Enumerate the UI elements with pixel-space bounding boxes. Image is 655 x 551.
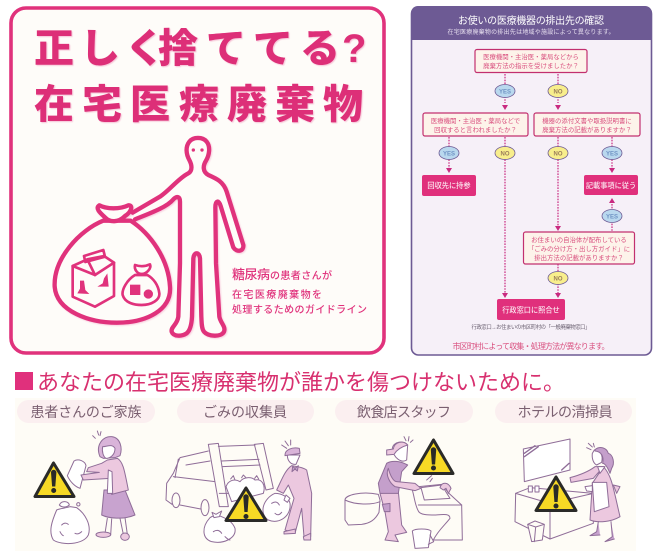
question text: 医療機関・主治医・薬局などから	[483, 52, 579, 61]
label text: ホテルの清掃員	[518, 404, 612, 420]
NO ovals: NO	[554, 89, 563, 95]
NO ovals: NO	[500, 151, 510, 157]
person outline	[133, 138, 243, 336]
NO ovals: NO	[554, 151, 563, 157]
flowchart header	[411, 6, 652, 40]
flow connectors	[449, 74, 612, 295]
question text: 廃棄方法の指示を受けましたか？	[483, 61, 579, 70]
flowchart header: 在宅医療廃棄物の排出先は地域や施設によって異なります。	[448, 28, 614, 36]
subtitle: 糖尿病	[232, 267, 270, 282]
NO ovals	[495, 84, 568, 284]
flowchart header: お使いの医療機器の排出先の確認	[458, 14, 604, 27]
icons: warning triangles	[35, 440, 576, 520]
panel: illustration strip	[15, 398, 636, 551]
title	[34, 27, 366, 127]
warning 3	[414, 440, 453, 474]
YES ovals	[439, 84, 622, 222]
heading: section title: あなたの在宅医療廃棄物が誰かを傷つけないために。	[37, 370, 565, 395]
warning 1	[35, 463, 74, 496]
title: 在宅医療廃棄物	[34, 83, 363, 127]
subtitle: 処理するためのガイドライン	[232, 303, 367, 316]
question text	[431, 52, 632, 262]
flowchart notes	[452, 323, 610, 351]
flowchart notes: 行政窓口→お住まいの市区町村の「一般廃棄物窓口」	[472, 323, 590, 331]
illustration: restaurant staff	[345, 437, 462, 548]
label text: ごみの収集員	[203, 404, 287, 420]
garbage bag	[55, 221, 170, 323]
eyes	[192, 148, 195, 152]
small bag	[123, 275, 159, 305]
label text	[30, 404, 612, 420]
subtitle	[232, 267, 367, 316]
NO ovals: NO	[554, 276, 563, 282]
YES ovals: YES	[606, 214, 618, 220]
label text: 飲食店スタッフ	[357, 404, 451, 420]
subtitle: 在宅医療廃棄物を	[232, 288, 322, 301]
YES ovals: YES	[499, 89, 511, 95]
result boxes: 行政窓口に照合せ	[502, 306, 560, 314]
result boxes: 記載事項に従う	[586, 181, 636, 190]
question text: 回収すると言われましたか？	[434, 126, 517, 134]
arrowheads	[446, 105, 615, 298]
question text: 「ごみの分け方・出し方ガイド」に	[528, 244, 630, 253]
milk carton	[73, 250, 114, 307]
warning 2	[226, 488, 266, 520]
title: 正しく捨ててる?	[34, 27, 366, 71]
question text: お住まいの自治体が配布している	[531, 235, 627, 244]
question boxes	[423, 50, 640, 264]
YES ovals: YES	[443, 151, 455, 157]
icon: person with garbage bag	[55, 138, 243, 336]
panel: disposal flowchart	[411, 6, 652, 355]
panel: cover	[11, 8, 384, 353]
result boxes: 回収先に持参	[427, 181, 471, 190]
illustration: patient's family	[51, 431, 135, 544]
question text: 廃棄方法の記載がありますか？	[542, 125, 632, 134]
illustration: garbage collector	[166, 440, 312, 542]
question text: 排出方法の記載がありますか？	[534, 253, 624, 262]
YES ovals: YES	[606, 151, 618, 157]
result boxes	[422, 175, 638, 320]
question text: 機器の添付文書や取扱説明書に	[542, 116, 632, 125]
question text: 医療機関・主治医・薬局などで	[431, 116, 520, 125]
warning 4	[536, 477, 576, 510]
label pills	[17, 400, 632, 423]
illustration: hotel cleaner	[515, 439, 620, 542]
flowchart notes: 市区町村によって収集・処理方法が異なります。	[452, 341, 610, 351]
subtitle: の患者さんが	[270, 269, 332, 282]
label text: 患者さんのご家族	[30, 404, 142, 420]
